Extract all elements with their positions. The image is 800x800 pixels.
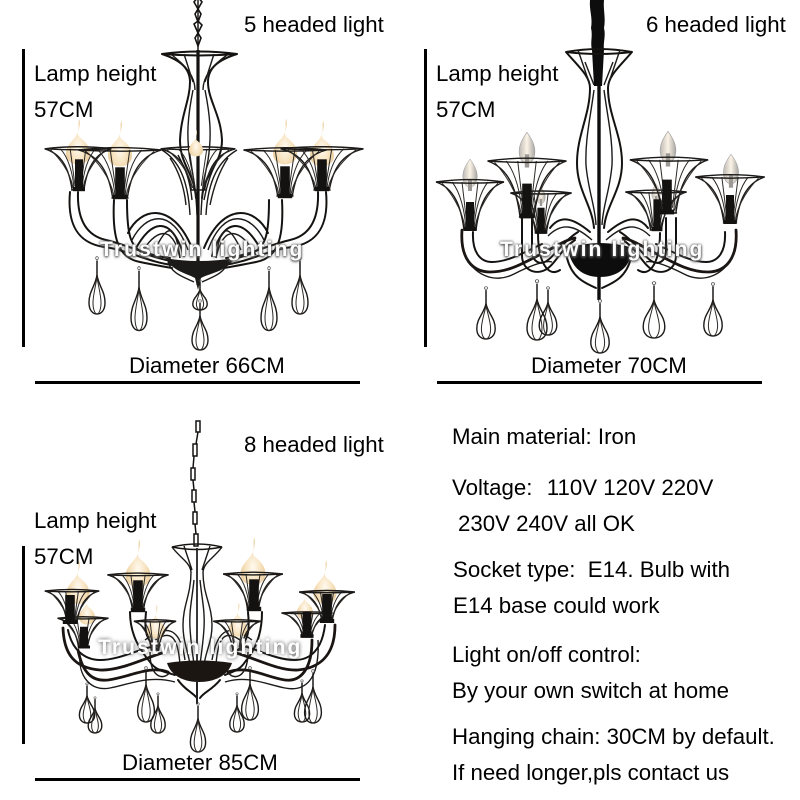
chandelier: 5 headed light [45,0,363,350]
spec: control: Light on/off control: [452,642,641,667]
spec: chain continued: If need longer,pls contact us [452,760,729,785]
height bar [424,49,427,347]
arms and bowl [63,612,335,704]
label: 57CM: 57CM [34,544,93,569]
panel: 5 headed dimensions [22,12,385,384]
panel: product specifications [452,424,775,785]
watermark: Trustwin lighting [100,238,305,261]
spec: voltage continued: 230V 240V all OK [458,511,635,536]
panel: 6 headed dimensions [424,12,787,384]
arms and bowl [462,218,736,288]
hanging chain [194,0,202,54]
label: lamp height: Lamp height [436,61,559,86]
black wrapped cord [590,0,605,86]
spec: socket: Socket type: E14. Bulb with [453,557,730,582]
spec: chain: Hanging chain: 30CM by default. [452,724,775,749]
hanging wire drops [79,667,321,752]
spec: material: Main material: Iron [452,424,636,449]
diameter bar [35,381,360,384]
flower cups with bulbs [436,131,765,234]
heading: 6 headed light: 6 headed light [646,12,787,37]
central vase cage [172,544,222,665]
arms and bowl [70,192,326,290]
watermark: Trustwin lighting [500,238,705,261]
heading: 5 headed light: 5 headed light [244,12,385,37]
chandelier: 6 headed light [436,0,765,353]
hanging chain [191,421,200,546]
central vase cage [566,49,632,300]
label: diameter: Diameter 66CM [129,353,285,378]
diameter bar [437,381,762,384]
spec: socket continued: E14 base could work [453,593,660,618]
central vase cage [162,50,237,285]
hanging wire drops [89,257,308,350]
heading: 8 headed light: 8 headed light [244,432,385,457]
diameter bar [35,778,360,781]
height bar [22,546,25,744]
label: lamp height: Lamp height [34,508,157,533]
label: 57CM: 57CM [34,97,93,122]
hanging wire drops [477,280,722,353]
flower cups with flames [45,119,363,199]
chandelier: 8 headed light [45,421,355,752]
panel: 8 headed dimensions [22,432,385,781]
spec: control continued: By your own switch at home [452,678,729,703]
spec: voltage: Voltage: 110V 120V 220V [452,475,714,500]
flower cups with flames [45,538,355,650]
label: lamp height: Lamp height [34,61,157,86]
label: 57CM: 57CM [436,97,495,122]
watermark: Trustwin lighting [98,636,303,659]
height bar [22,49,25,347]
label: diameter: Diameter 85CM [122,750,278,775]
label: diameter: Diameter 70CM [531,353,687,378]
